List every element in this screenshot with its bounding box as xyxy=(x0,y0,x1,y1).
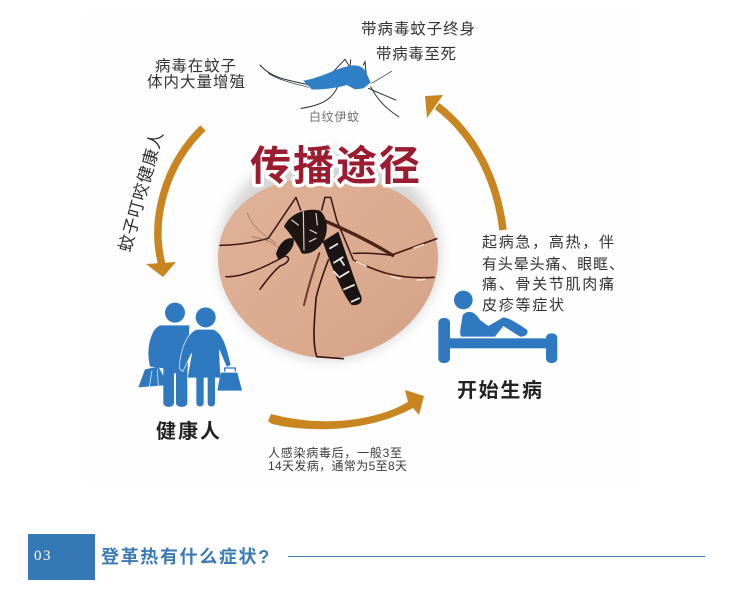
thorax xyxy=(284,210,327,254)
text: mosquito bites healthy people: 蚊子叮咬健康人 xyxy=(116,130,167,254)
abdomen xyxy=(323,232,362,305)
panel: faint image backdrop xyxy=(85,12,640,484)
text: incubation period: 人感染病毒后，一般3至 xyxy=(268,445,402,460)
section number: 03 xyxy=(34,548,52,564)
text: symptoms: 皮疹等症状 xyxy=(482,296,564,314)
text: carries virus for life xyxy=(361,20,475,63)
text: virus multiplies in mosquito xyxy=(147,57,245,91)
label: species: 白纹伊蚊 xyxy=(309,109,359,124)
mosquito photo xyxy=(220,197,437,359)
front legs xyxy=(220,197,392,359)
text: symptoms: 有头晕头痛、眼眶、 xyxy=(482,256,624,273)
arrow: virus returns to mosquito xyxy=(425,95,503,230)
arrow: healthy person to illness xyxy=(268,390,424,429)
section heading: 登革热有什么症状? xyxy=(101,547,271,567)
photo: skin disc with mosquito xyxy=(218,150,440,360)
striped hind legs xyxy=(327,222,393,255)
text: incubation period xyxy=(268,445,407,473)
text: symptoms xyxy=(482,234,624,314)
label: healthy person: 健康人 xyxy=(156,419,220,443)
text: incubation period: 14天发病，通常为5至8天 xyxy=(268,458,407,473)
title: 传播途径 xyxy=(250,143,420,189)
head xyxy=(276,238,294,259)
icon: blue mosquito xyxy=(260,59,399,117)
title: 传播途径 xyxy=(250,143,420,189)
section number box xyxy=(28,534,95,580)
icon: patient in bed xyxy=(438,291,557,363)
text: virus multiplies in mosquito: 病毒在蚊子 xyxy=(155,57,236,75)
text: virus multiplies in mosquito: 体内大量增殖 xyxy=(147,73,245,91)
text: symptoms: 痛、骨关节肌肉痛 xyxy=(482,276,614,293)
arrow: mosquito bites healthy person xyxy=(146,128,203,277)
text: carries virus for life: 带病毒至死 xyxy=(376,45,456,63)
text: carries virus for life: 带病毒蚊子终身 xyxy=(361,20,475,38)
heading rule xyxy=(288,556,705,557)
icon: healthy couple xyxy=(138,303,242,407)
text: symptoms: 起病急，高热，伴 xyxy=(482,234,614,251)
label: onset of illness: 开始生病 xyxy=(457,379,542,402)
